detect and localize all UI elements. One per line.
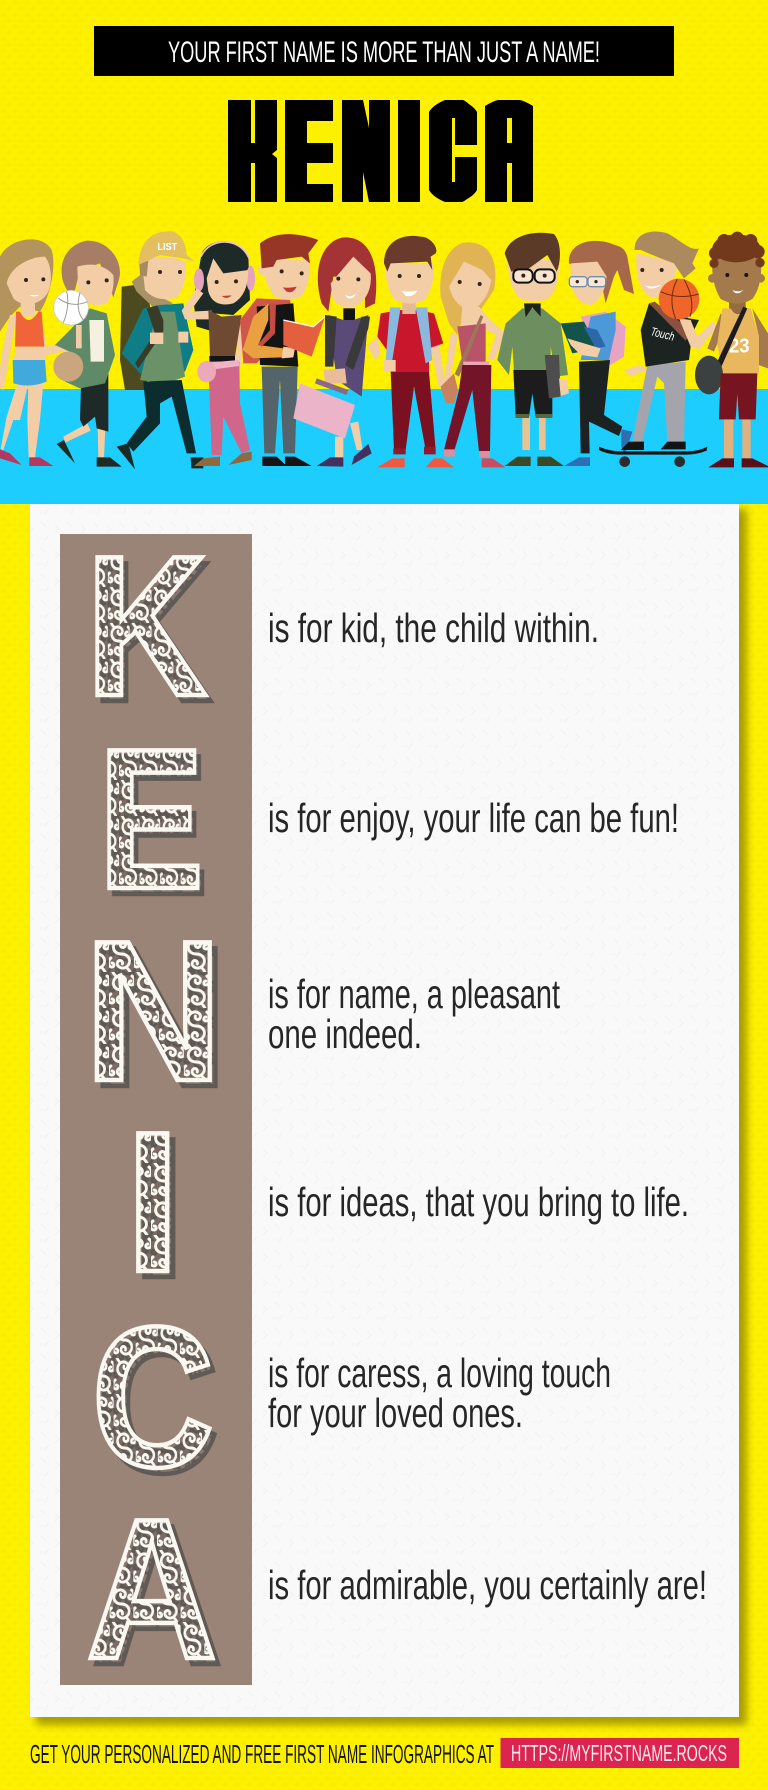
letter N: N [84,899,223,1123]
person: girl in orange top [0,239,77,466]
person: skater boy with basketball [599,231,717,467]
text: C meaning: is for caress, a loving touch [268,1350,611,1396]
letter I: I [125,1091,181,1314]
text: C meaning: for your loved ones. [268,1390,523,1436]
letter A: A [86,1477,217,1701]
person: boy in yellow tank top with shoulder bag: 23 [729,335,750,358]
person: girl with ponytail and tablet [561,241,634,466]
title: name: N [338,73,395,230]
panel: acrostic meanings [30,504,739,1717]
person: boy in red shirt with blue straps [367,236,454,467]
person: boy with book and backpack [240,234,325,466]
title: name: K [224,73,275,229]
title: name [228,100,533,202]
blue floor band [0,389,768,504]
text: C meaning [268,1350,611,1436]
title: name: E [281,74,336,229]
person: boy in yellow tank top with shoulder bag [695,232,768,467]
panel shadow [36,509,747,1725]
text: N meaning: one indeed. [268,1011,422,1057]
top banner bar [94,26,674,76]
title: name: I [393,73,425,230]
person: girl with headphones [182,241,255,466]
person: boy with glasses and laptop [497,233,569,466]
person: red-haired girl with pink bag [293,237,376,467]
person: skater boy with basketball: Touch [649,324,676,344]
letter column [60,515,252,1701]
text: N meaning: is for name, a pleasant [268,971,560,1017]
title: name: C [427,72,480,229]
illustration: group of twelve students [0,231,768,469]
right half of the student group [367,231,768,467]
letter C: C [92,1286,214,1509]
letter E: E [98,708,204,931]
person: blonde girl with shoulder bag [440,242,506,467]
person: hiker with cap and backpack: LIST [157,242,177,253]
title: name: A [486,73,532,229]
person: hiker with cap and backpack [117,231,203,469]
text: K meaning: is for kid, the child within. [268,605,599,651]
person: girl with volleyball in green jacket [53,241,122,467]
text: N meaning [268,971,560,1057]
letter K: K [86,515,207,738]
